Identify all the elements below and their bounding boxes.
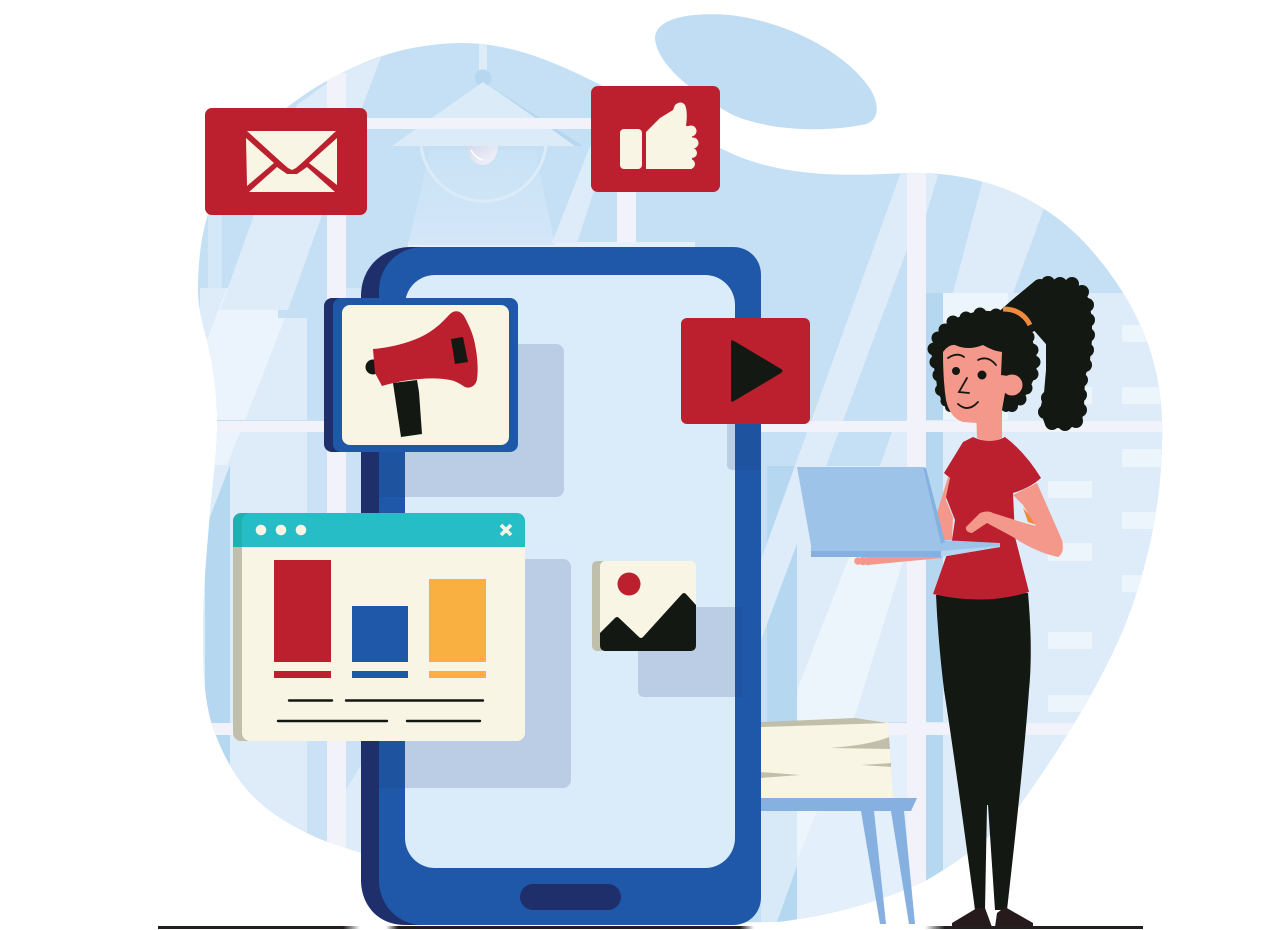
- ear: [1002, 374, 1022, 396]
- face: [943, 345, 1008, 423]
- left hand under laptop: [854, 553, 942, 565]
- window title bar: [233, 513, 525, 547]
- placeholder text lines: [278, 700, 483, 721]
- orange inner arm shadow: [1023, 508, 1040, 526]
- background blob: small top cloud: [655, 14, 877, 129]
- illustration: digital marketing scene: [158, 14, 1162, 929]
- phone body: [379, 247, 761, 925]
- eyes: [952, 367, 986, 380]
- screen cards: [379, 344, 761, 788]
- woman holding a laptop: [797, 276, 1095, 927]
- table with paper stack: [761, 718, 917, 924]
- background blob: room with window: [190, 30, 1180, 930]
- icon: thumbs up card: [591, 86, 720, 192]
- trousers: [936, 593, 1031, 910]
- right arm and hand: [966, 483, 1063, 557]
- left window panes: [200, 57, 381, 852]
- eyebrows, nose and mouth: [948, 355, 996, 408]
- ceiling lamp: [367, 44, 594, 245]
- home button: [520, 884, 621, 910]
- ponytail: [1003, 276, 1095, 431]
- hair: [928, 308, 1040, 412]
- phone screen: [405, 275, 735, 868]
- icon: video play card: [681, 318, 810, 424]
- icon: mail card: [205, 108, 367, 215]
- browser window with bar chart: [233, 513, 525, 741]
- hair tie: [1003, 309, 1030, 325]
- laptop: [797, 467, 1000, 557]
- shoes: [952, 907, 1033, 927]
- right-hand wall with distant buildings: [926, 172, 1166, 930]
- ground line: [158, 926, 1143, 929]
- lower window pane: [761, 172, 936, 930]
- window body: [233, 513, 273, 741]
- phone body shadow: [361, 247, 500, 925]
- neck: [976, 410, 1002, 443]
- bar chart: [274, 560, 486, 678]
- icon: megaphone card: [324, 298, 518, 452]
- window frame bars: [190, 73, 1171, 892]
- left arm: [937, 477, 953, 540]
- smartphone: [361, 247, 761, 925]
- red t-shirt: [933, 437, 1041, 600]
- icon: image thumbnail card: [592, 561, 696, 651]
